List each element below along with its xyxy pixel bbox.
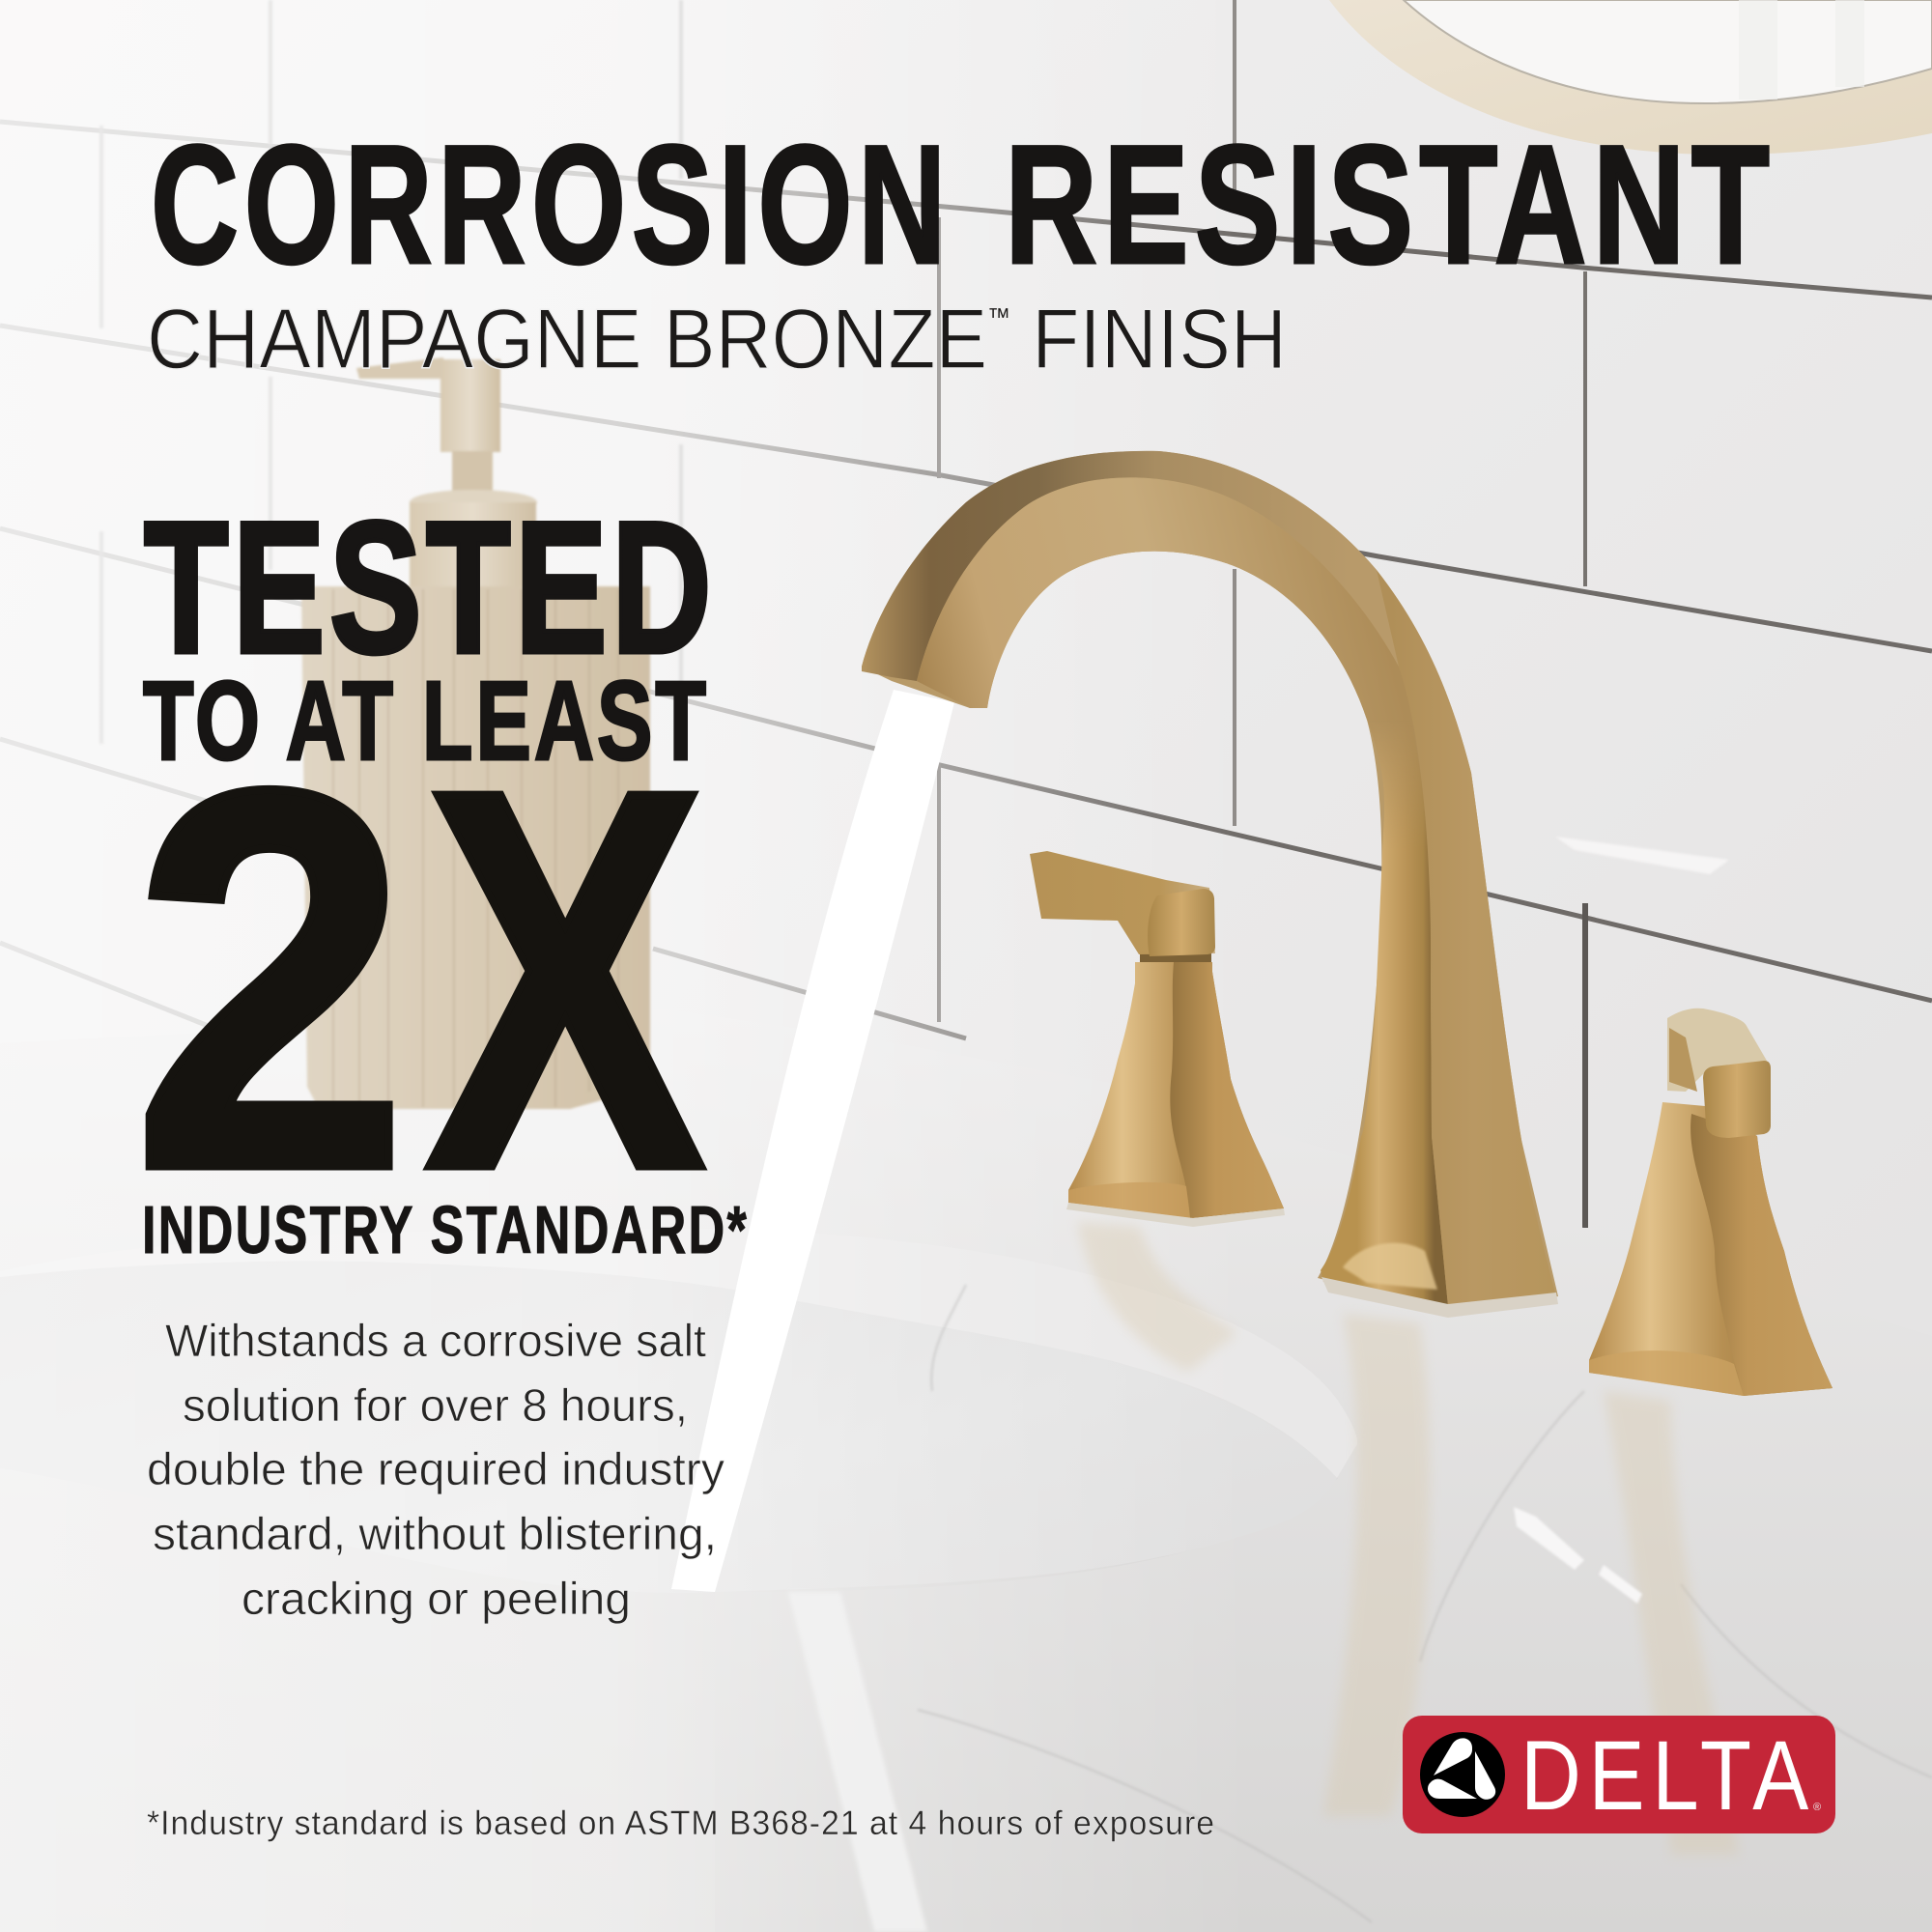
headline: 2X: 2 bbox=[132, 679, 409, 1281]
spout inner face bbox=[917, 477, 1431, 980]
headline: 2X: X bbox=[425, 679, 707, 1281]
marble veining bbox=[918, 1285, 1932, 1922]
wall mirror with champagne frame bbox=[1329, 0, 1932, 155]
water reflection in counter bbox=[788, 1592, 927, 1932]
body description: standard, without blistering, bbox=[153, 1508, 717, 1559]
headline: 2X bbox=[132, 679, 707, 1281]
Delta logo bbox=[1403, 1716, 1835, 1833]
undermount sink bowl bbox=[0, 1262, 1337, 1593]
body description: solution for over 8 hours, bbox=[183, 1379, 688, 1431]
spout upper band bbox=[862, 451, 1399, 681]
icon: delta triangle mark bbox=[1420, 1732, 1505, 1817]
left faucet handle bbox=[1030, 851, 1285, 1227]
body description: double the required industry bbox=[147, 1443, 724, 1494]
counter front edge band bbox=[0, 1229, 1357, 1478]
body description: Withstands a corrosive salt bbox=[165, 1315, 706, 1366]
registered mark: ® bbox=[1813, 1802, 1821, 1813]
subheading: champagne bronze finish: FINISH bbox=[1010, 291, 1287, 386]
heading: corrosion resistant: CORROSION bbox=[151, 111, 952, 299]
faucet base glow bbox=[1343, 1243, 1437, 1290]
faucet water stream bbox=[671, 690, 954, 1592]
body description: cracking or peeling bbox=[242, 1573, 631, 1624]
subheading: champagne bronze finish: ™ bbox=[987, 302, 1010, 331]
soap dispenser bbox=[301, 357, 650, 1109]
logo wordmark: DELTA bbox=[1520, 1720, 1816, 1831]
faucet column left face bbox=[1321, 720, 1448, 1306]
counter highlights bbox=[1514, 837, 1729, 1604]
gold reflections on counter bbox=[1077, 1222, 1739, 1855]
subheading: champagne bronze finish: CHAMPAGNE BRONZE bbox=[147, 291, 1066, 386]
vanity countertop bbox=[0, 1009, 1932, 1932]
body description bbox=[147, 1315, 724, 1624]
footnote: *Industry standard is based on ASTM B368-21 at 4 hours of exposure bbox=[147, 1804, 1215, 1842]
headline: industry standard: INDUSTRY STANDARD* bbox=[142, 1192, 749, 1267]
faucet spout bbox=[862, 451, 1558, 1318]
right faucet handle bbox=[1589, 1009, 1833, 1396]
faucet column right face bbox=[1377, 570, 1556, 1306]
faucet base gasket bbox=[1321, 1277, 1558, 1318]
heading: corrosion resistant bbox=[151, 111, 1776, 299]
headline: tested: TESTED bbox=[144, 483, 716, 693]
lower counter reflection area bbox=[0, 1264, 1338, 1932]
headline: to at least: TO AT LEAST bbox=[143, 658, 709, 783]
